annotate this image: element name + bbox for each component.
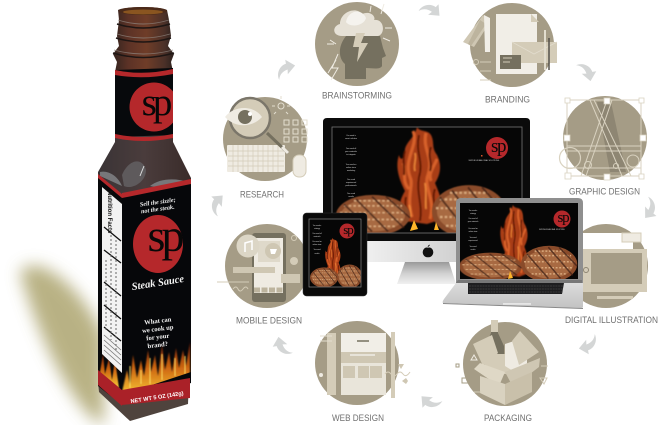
device: laptop: strategy <box>470 212 476 215</box>
device: laptop: SIZZLING IDEAS. REAL SOLUTIONS. <box>539 228 566 231</box>
device: tablet: You need an <box>312 241 322 243</box>
neck label <box>115 68 178 141</box>
device: desktop monitor <box>323 118 530 284</box>
device: laptop: sp <box>558 210 569 226</box>
label: mobile design: MOBILE DESIGN <box>236 316 302 326</box>
device: laptop: online store <box>469 230 477 233</box>
label front panel: NET WT 5 OZ (142g) <box>130 391 184 405</box>
icon: web design <box>315 321 410 405</box>
red net weight band <box>122 378 190 405</box>
bottle shoulders <box>98 135 191 205</box>
label question: brand? <box>147 341 168 350</box>
device: tablet: You need all <box>312 233 322 235</box>
monitor screen: online store <box>346 166 356 169</box>
label: packaging: PACKAGING <box>484 413 532 423</box>
monitor screen: results <box>348 195 354 198</box>
icon: mobile design <box>217 224 309 308</box>
label front panel <box>122 179 191 405</box>
tagline <box>139 197 176 215</box>
nutrition facts panel: Nutrition Facts <box>106 191 112 234</box>
device: tablet: You need <box>313 249 321 251</box>
icon: branding <box>463 3 557 87</box>
device: laptop: You need all <box>468 218 478 220</box>
icon: packaging <box>456 320 548 406</box>
icon: graphic design <box>560 96 647 180</box>
device: tablet: You need a <box>313 225 321 227</box>
neck label: sp <box>142 81 171 124</box>
device: laptop: experienced <box>468 239 478 242</box>
label: research: RESEARCH <box>240 190 284 200</box>
nutrition facts panel <box>102 187 122 373</box>
device: tablet <box>303 213 367 296</box>
monitor screen: professionals <box>345 184 357 187</box>
label: brainstorming: BRAINSTORMING <box>322 90 392 100</box>
monitor screen: experienced <box>346 181 356 184</box>
device: tablet: results <box>315 252 320 255</box>
monitor screen: to integrate <box>346 153 356 156</box>
label: web design: WEB DESIGN <box>332 413 384 423</box>
label question: What can <box>144 316 172 327</box>
icon: brainstorming <box>315 2 399 86</box>
base of bottle <box>98 378 189 421</box>
product name: Steak Sauce <box>131 274 185 293</box>
label question <box>142 316 174 350</box>
label: branding: BRANDING <box>485 94 530 104</box>
monitor screen: You need a <box>346 135 357 137</box>
monitor screen <box>336 128 508 233</box>
icon: apple logo <box>423 245 433 257</box>
bottle shadow <box>20 266 104 424</box>
monitor screen: smart solution <box>345 137 357 140</box>
monitor screen: sp <box>491 136 506 157</box>
process arrows <box>211 4 657 408</box>
flames on label <box>122 342 191 390</box>
steak sauce bottle <box>98 7 191 421</box>
device: tablet: strategy <box>314 227 320 230</box>
tagline: Sell the sizzle; <box>139 197 176 208</box>
monitor screen: your materials <box>345 150 357 153</box>
monitor screen: SIZZLING IDEAS. REAL SOLUTIONS. <box>468 159 500 162</box>
device: laptop: You need an <box>468 228 478 230</box>
label: graphic design: GRAPHIC DESIGN <box>569 186 640 196</box>
icon: digital illustration <box>564 224 648 308</box>
icon: research <box>223 96 307 181</box>
device: laptop: your materials <box>468 220 478 223</box>
monitor screen: marketing <box>347 169 355 172</box>
label question: for your <box>146 333 170 342</box>
monitor screen: You need <box>347 193 355 195</box>
bottle neck glass <box>113 7 174 72</box>
monitor screen: You need all <box>346 148 357 150</box>
label side panel <box>98 174 122 406</box>
device: laptop <box>443 198 583 309</box>
device: tablet: online store <box>313 243 321 246</box>
device: laptop: You need a <box>469 210 477 212</box>
device: laptop: results <box>471 248 476 251</box>
device: tablet: materials <box>314 235 321 238</box>
label question: we cook up <box>142 324 174 335</box>
logo on label: sp <box>148 210 183 261</box>
monitor screen: You need an <box>346 164 356 166</box>
tagline: not the steak. <box>141 204 175 215</box>
logo on label <box>133 210 183 273</box>
monitor screen: You need <box>347 179 355 181</box>
device: laptop: You need <box>469 237 477 239</box>
device: tablet: sp <box>343 222 353 237</box>
device: laptop: You need <box>469 246 477 248</box>
